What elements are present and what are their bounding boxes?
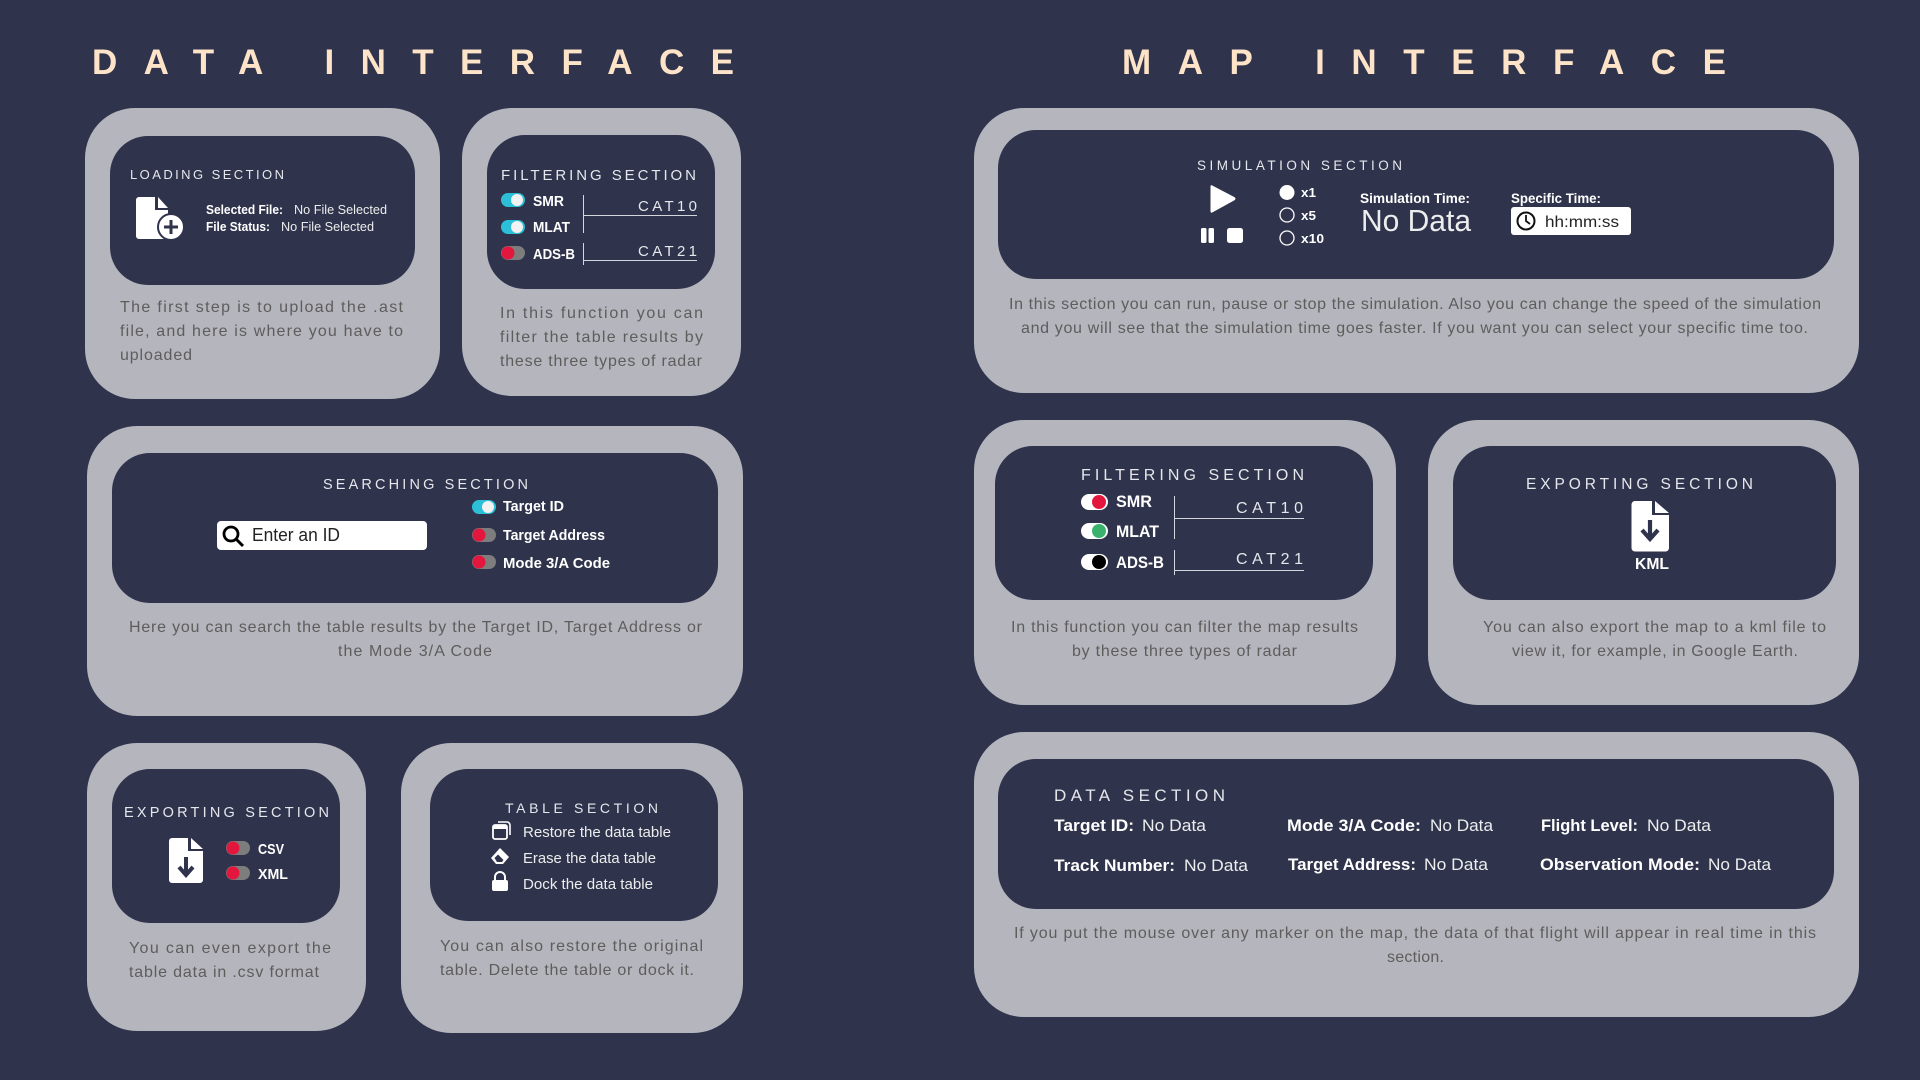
file info: File Status:	[206, 219, 270, 234]
toggles: Target ID	[503, 498, 564, 515]
description: You can also export the map to a kml file to	[1483, 619, 1826, 636]
title: data interface: DATA INTERFACE	[92, 43, 734, 82]
description: table. Delete the table or dock it.	[440, 962, 694, 979]
heading: FILTERING SECTION	[501, 167, 696, 184]
row: restore	[493, 822, 671, 841]
description	[1009, 296, 1821, 337]
description: You can also restore the original	[440, 938, 703, 955]
format toggles: CSV	[258, 841, 284, 858]
simulation time: No Data	[1361, 203, 1472, 238]
panel: data section	[974, 732, 1859, 1017]
card background	[87, 426, 743, 716]
field: target address: Target Address:	[1288, 856, 1416, 874]
heading: FILTERING SECTION	[1081, 467, 1304, 484]
inner panel	[112, 453, 718, 603]
heading: TABLE SECTION	[505, 800, 658, 816]
field: mode 3/a code: Mode 3/A Code:	[1287, 817, 1421, 835]
panel: searching section	[87, 426, 743, 716]
icon: add file	[136, 197, 184, 240]
toggles: SMR	[1116, 492, 1152, 511]
file info: No File Selected	[281, 219, 374, 234]
row: restore: Restore the data table	[523, 825, 671, 841]
icon: download file	[169, 838, 203, 883]
row: dock: Dock the data table	[523, 877, 653, 893]
toggles: MLAT	[533, 219, 570, 236]
inner panel	[1453, 446, 1836, 600]
heading: EXPORTING SECTION	[124, 805, 329, 821]
format toggles: XML	[258, 866, 288, 883]
category brackets: CAT10	[638, 198, 697, 215]
description	[129, 619, 703, 660]
description	[440, 938, 703, 979]
inner panel	[110, 136, 415, 285]
description: Here you can search the table results by the Target ID, Target Address or	[129, 619, 703, 636]
description: You can even export the	[129, 940, 331, 957]
file info: No File Selected	[294, 202, 387, 217]
description: If you put the mouse over any marker on the map, the data of that flight will appear in real time in this	[1014, 925, 1816, 942]
description: view it, for example, in Google Earth.	[1512, 643, 1798, 660]
icon: stop	[1227, 228, 1243, 243]
search input	[217, 521, 427, 550]
field: track number: Track Number:	[1054, 857, 1175, 875]
field: mode 3/a code	[1287, 817, 1494, 835]
toggles: Target Address	[503, 527, 605, 544]
description: these three types of radar	[500, 353, 703, 370]
panel: exporting section (map)	[1428, 420, 1859, 705]
title: map interface: MAP INTERFACE	[1122, 43, 1726, 82]
format toggles	[226, 841, 288, 883]
panel: filtering section (data)	[462, 108, 741, 396]
toggles: ADS-B	[533, 246, 575, 263]
description: In this section you can run, pause or stop the simulation. Also you can change the speed of the simulation	[1009, 296, 1821, 313]
panel: loading section	[85, 108, 440, 399]
specific time	[1511, 190, 1631, 235]
label: KML	[1635, 556, 1669, 573]
field: observation mode: Observation Mode:	[1540, 856, 1700, 874]
description: the Mode 3/A Code	[338, 643, 492, 660]
field: flight level: Flight Level:	[1541, 817, 1638, 835]
description: In this function you can filter the map results	[1011, 619, 1358, 636]
panel: filtering section (map)	[974, 420, 1396, 705]
toggles: MLAT	[1116, 522, 1160, 541]
row: erase: Erase the data table	[523, 851, 656, 867]
description	[1483, 619, 1826, 660]
speed radios: x1	[1301, 185, 1316, 200]
panel: table section	[401, 743, 743, 1033]
icon: pause	[1201, 228, 1214, 243]
specific time: Specific Time:	[1511, 190, 1601, 206]
speed radios: x10	[1301, 231, 1324, 246]
inner panel	[487, 135, 715, 289]
heading: SEARCHING SECTION	[323, 477, 528, 493]
file info	[206, 202, 387, 234]
inner panel	[995, 446, 1373, 600]
field: target address: No Data	[1424, 856, 1489, 874]
search input: Enter an ID	[252, 525, 340, 545]
field: observation mode	[1540, 856, 1772, 874]
inner panel	[998, 130, 1834, 279]
description: file, and here is where you have to	[120, 323, 403, 340]
row: dock	[492, 872, 653, 893]
card background	[401, 743, 743, 1033]
card background	[974, 732, 1859, 1017]
description: section.	[1387, 949, 1444, 966]
field: mode 3/a code: No Data	[1430, 817, 1494, 835]
icon: play	[1211, 186, 1235, 212]
card background	[974, 108, 1859, 393]
icon: download file	[1632, 501, 1669, 552]
description	[1014, 925, 1816, 966]
toggles: Mode 3/A Code	[503, 555, 610, 572]
field: target address	[1288, 856, 1489, 874]
category brackets: CAT21	[638, 243, 697, 260]
description: The first step is to upload the .ast	[120, 299, 404, 316]
field: flight level	[1541, 817, 1712, 835]
description	[1011, 619, 1358, 660]
field: target id: No Data	[1142, 817, 1207, 835]
heading: SIMULATION SECTION	[1197, 158, 1402, 173]
card background	[1428, 420, 1859, 705]
toggles	[501, 193, 575, 263]
category brackets	[1174, 496, 1304, 575]
description	[120, 299, 404, 364]
field: flight level: No Data	[1647, 817, 1712, 835]
description: filter the table results by	[500, 329, 703, 346]
description	[129, 940, 331, 981]
card background	[462, 108, 741, 396]
heading: LOADING SECTION	[130, 167, 284, 182]
category brackets	[583, 195, 697, 265]
field: track number	[1054, 857, 1249, 875]
toggles	[472, 498, 610, 572]
toggles: ADS-B	[1116, 553, 1164, 572]
panel: exporting section (data)	[87, 743, 366, 1031]
specific time: hh:mm:ss	[1545, 214, 1619, 231]
speed radios	[1280, 185, 1324, 246]
heading: EXPORTING SECTION	[1526, 476, 1753, 493]
category brackets: CAT21	[1236, 551, 1303, 568]
field: track number: No Data	[1184, 857, 1249, 875]
speed radios: x5	[1301, 208, 1316, 223]
card background	[85, 108, 440, 399]
field: target id: Target ID:	[1054, 817, 1134, 835]
description: and you will see that the simulation time goes faster. If you want you can select your specific time too.	[1021, 320, 1808, 337]
field: target id	[1054, 817, 1207, 835]
inner panel	[112, 769, 340, 923]
heading: DATA SECTION	[1054, 786, 1225, 805]
card background	[974, 420, 1396, 705]
row: erase	[491, 848, 656, 867]
category brackets: CAT10	[1236, 500, 1303, 517]
panel: simulation section	[974, 108, 1859, 393]
description: table data in .csv format	[129, 964, 320, 981]
inner panel	[430, 769, 718, 921]
file info: Selected File:	[206, 202, 283, 217]
inner panel	[998, 759, 1834, 909]
toggles	[1081, 492, 1164, 572]
card background	[87, 743, 366, 1031]
toggles: SMR	[533, 193, 564, 210]
simulation time: Simulation Time:	[1360, 190, 1470, 206]
field: observation mode: No Data	[1708, 856, 1772, 874]
description: In this function you can	[500, 305, 703, 322]
description: uploaded	[120, 347, 192, 364]
description: by these three types of radar	[1072, 643, 1298, 660]
description	[500, 305, 703, 370]
